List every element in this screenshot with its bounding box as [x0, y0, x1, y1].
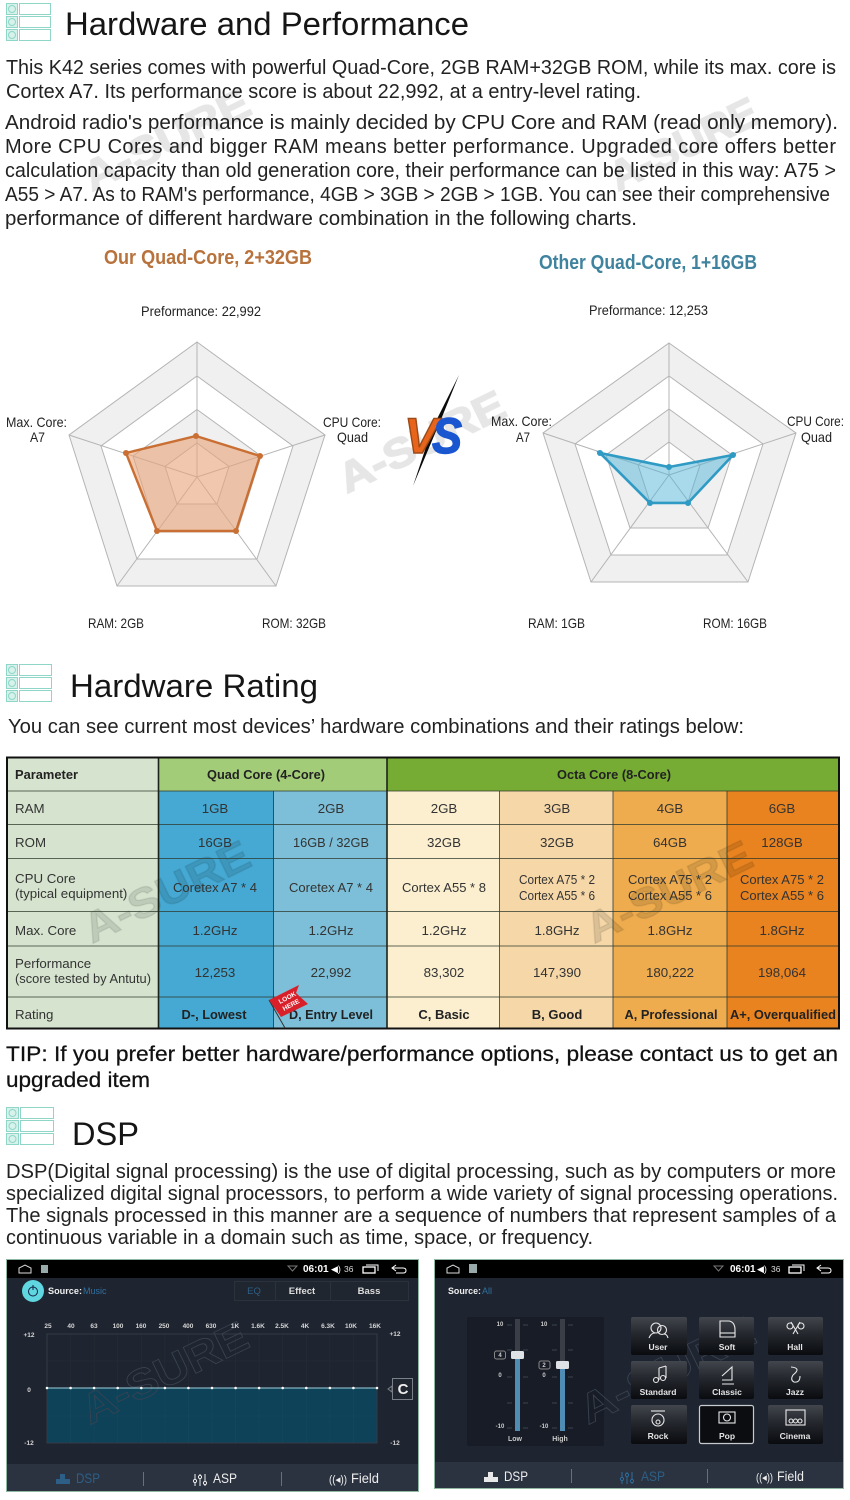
table: octa 4GB column: Cortex A75 * 2	[628, 872, 712, 887]
bottom navigation	[435, 1462, 843, 1488]
table: octa 4GB column: 180,222	[646, 965, 694, 980]
table: octa 3GB column: B, Good	[532, 1007, 582, 1022]
icon: VS badge: S	[432, 408, 462, 464]
table: octa 4GB column	[624, 801, 718, 1022]
table: 2GB column: D, Entry Level	[289, 1007, 373, 1022]
radar chart: our quad-core: Preformance: 22,992	[141, 303, 261, 319]
radar chart: our quad-core: A7	[30, 429, 45, 445]
icon: section list 3	[6, 1108, 54, 1144]
table: octa 3GB column: 32GB	[540, 835, 574, 850]
equalizer chart: -12	[24, 1440, 34, 1447]
equalizer chart: 40	[67, 1323, 75, 1330]
watermark: A-SURE	[571, 1308, 763, 1433]
table: octa 6GB column: 6GB	[769, 801, 795, 816]
table: octa 3GB column: 3GB	[544, 801, 570, 816]
table: octa 6GB column: 1.8GHz	[759, 923, 805, 938]
text block: tip	[6, 1043, 838, 1092]
preset buttons: Standard	[640, 1387, 676, 1397]
radar chart: our quad-core: Max. Core:	[6, 414, 67, 430]
table: 2GB column: 2GB	[318, 801, 344, 816]
bottom navigation: ((◂))	[756, 1472, 773, 1484]
tabs: Bass	[358, 1286, 380, 1297]
table: octa 6GB column: 128GB	[761, 835, 803, 850]
icon: reset button	[388, 1378, 412, 1400]
table: parameter column: CPU Core	[15, 871, 76, 886]
chart title: our: Our Quad-Core, 2+32GB	[104, 247, 312, 269]
table: 2GB column: 22,992	[311, 965, 351, 980]
equalizer chart: 100	[113, 1323, 124, 1330]
table: octa 6GB column: Cortex A55 * 6	[740, 888, 824, 903]
equalizer chart: +12	[389, 1331, 401, 1338]
slider panel: -10	[540, 1424, 549, 1430]
table: octa 2GB column: Cortex A55 * 8	[402, 880, 486, 895]
chart title: other: Other Quad-Core, 1+16GB	[539, 252, 757, 274]
text block: DSP description: The signals processed in this manner are a sequence of numbers that represent samples of a	[6, 1205, 837, 1227]
rating table	[7, 758, 839, 1029]
icon: status bar left	[19, 1265, 48, 1273]
equalizer chart: 1K	[231, 1323, 239, 1330]
table: octa 4GB column: 64GB	[653, 835, 687, 850]
bottom navigation: DSP	[76, 1470, 100, 1486]
icon: look here flag: HERE	[282, 998, 301, 1013]
radar chart: our quad-core: ROM: 32GB	[262, 615, 326, 631]
icon: status bar left	[447, 1264, 477, 1273]
status bar right	[714, 1264, 831, 1275]
table: octa 4GB column: 1.8GHz	[647, 923, 693, 938]
bottom navigation: DSP	[504, 1468, 528, 1484]
equalizer chart: 160	[136, 1323, 147, 1330]
table: 1GB column	[173, 801, 257, 1022]
equalizer chart: 630	[206, 1323, 217, 1330]
text block: DSP description: DSP(Digital signal processing) is the use of digital processing, such as by computers or more	[6, 1161, 836, 1183]
table: group headers: Quad Core (4-Core)	[207, 767, 325, 782]
radar chart: other quad-core: Max. Core:	[491, 413, 552, 429]
preset buttons: Soft	[719, 1342, 735, 1352]
heading: DSP: DSP	[72, 1116, 139, 1152]
watermarks over page background	[75, 79, 766, 502]
table: octa 2GB column: 83,302	[424, 965, 464, 980]
table: octa 3GB column: 147,390	[533, 965, 581, 980]
table: 1GB column: Coretex A7 * 4	[173, 880, 257, 895]
text block: tip: TIP: If you prefer better hardware/performance options, please contact us to get an	[6, 1043, 838, 1066]
radar chart: other quad-core: ROM: 16GB	[703, 615, 767, 631]
equalizer chart: 2.5K	[275, 1323, 289, 1330]
table: octa 2GB column: 32GB	[427, 835, 461, 850]
table: octa 2GB column	[402, 801, 486, 1022]
status bar right: ◀)	[757, 1264, 767, 1274]
table: parameter column: Rating	[15, 1007, 53, 1022]
table: octa 6GB column: A+, Overqualified	[730, 1007, 836, 1022]
status bar right: ◀)	[331, 1264, 341, 1274]
text block: explanation: performance of different hardware combination in the following charts.	[5, 208, 637, 230]
slider panel: 0	[542, 1373, 546, 1379]
rating table: A-SURE	[577, 831, 760, 952]
preset buttons: Jazz	[786, 1387, 804, 1397]
watermarks over page background: A-SURE	[75, 79, 258, 200]
icon: VS badge	[404, 375, 462, 486]
tabs: Effect	[289, 1286, 316, 1297]
radar chart: other quad-core: Quad	[801, 429, 832, 445]
table: octa 4GB column: A, Professional	[624, 1007, 718, 1022]
table: 2GB column: Coretex A7 * 4	[289, 880, 373, 895]
text block: explanation: Android radio's performance is mainly decided by CPU Core and RAM (read only memory).	[5, 112, 838, 134]
text block: intro	[6, 57, 836, 103]
watermarks over page background: A-SURE	[330, 381, 513, 502]
equalizer chart: 0	[27, 1387, 31, 1394]
table: 2GB column: 16GB / 32GB	[293, 835, 369, 850]
heading: Hardware Rating: Hardware Rating	[70, 668, 318, 704]
equalizer chart: 63	[90, 1323, 98, 1330]
slider panel: 10	[497, 1322, 504, 1328]
equalizer chart: -12	[390, 1440, 400, 1447]
radar chart: our quad-core	[6, 303, 381, 631]
table: parameter column: RAM	[15, 801, 45, 816]
table: octa 4GB column: 4GB	[657, 801, 683, 816]
icon: reset button: C	[398, 1381, 409, 1398]
table: octa 3GB column: Cortex A75 * 2	[519, 872, 595, 887]
tabs	[234, 1282, 408, 1300]
source label: Music	[83, 1286, 107, 1296]
preset buttons: Hall	[787, 1342, 803, 1352]
table: octa 2GB column: 2GB	[431, 801, 457, 816]
preset buttons: Cinema	[780, 1431, 811, 1441]
table: parameter column: Max. Core	[15, 923, 76, 938]
table: 1GB column: 12,253	[195, 965, 235, 980]
source label: Source:	[448, 1286, 481, 1297]
table: group headers: Octa Core (8-Core)	[557, 767, 671, 782]
table: 1GB column: 1GB	[202, 801, 228, 816]
slider panel: Low	[508, 1436, 523, 1443]
table: octa 4GB column: Cortex A55 * 6	[628, 888, 712, 903]
radar chart: other quad-core: RAM: 1GB	[528, 615, 585, 631]
table: 2GB column	[289, 801, 373, 1022]
preset buttons: Classic	[712, 1387, 742, 1397]
rating table: A-SURE	[75, 831, 258, 952]
text block: explanation: More CPU Cores and bigger RAM means better performance. Upgraded core offers better	[5, 136, 836, 158]
status bar right: 06:01	[303, 1264, 329, 1275]
text block: intro: Cortex A7. Its performance score is about 22,992, at a entry-level rating.	[6, 81, 641, 103]
icon: section list 1	[6, 4, 50, 40]
icon: look here flag: LOOK	[278, 991, 298, 1006]
slider panel: 0	[498, 1373, 502, 1379]
source label: All	[482, 1286, 492, 1296]
text block: DSP description: specialized digital signal processors, to perform a wide variety of signal processing operations.	[6, 1183, 838, 1205]
radar chart: other quad-core: Preformance: 12,253	[589, 302, 708, 318]
bottom navigation: ((◂))	[329, 1474, 347, 1486]
bottom navigation: ASP	[213, 1470, 237, 1486]
equalizer chart: +12	[23, 1332, 35, 1339]
equalizer chart: 25	[44, 1323, 52, 1330]
table: octa 6GB column	[730, 801, 836, 1022]
source label	[48, 1286, 107, 1297]
icon: power button	[22, 1280, 44, 1302]
bottom navigation: Field	[777, 1468, 804, 1484]
table: group headers	[207, 767, 671, 782]
slider panel: 2	[542, 1363, 546, 1369]
status bar right: 06:01	[730, 1264, 756, 1275]
slider panel: High	[552, 1436, 568, 1443]
table: parameter column: ROM	[15, 835, 46, 850]
equalizer chart: 16K	[369, 1323, 381, 1330]
panel: DSP equalizer screen	[6, 1260, 418, 1492]
radar chart: other quad-core: A7	[516, 429, 530, 445]
icon: look here flag	[269, 985, 308, 1028]
table: parameter column: (typical equipment)	[15, 886, 127, 901]
text block: intro: This K42 series comes with powerful Quad-Core, 2GB RAM+32GB ROM, while its max. core is	[6, 57, 836, 79]
table: octa 6GB column: 198,064	[758, 965, 806, 980]
table: parameter column: Performance	[15, 956, 91, 971]
table: parameter column: Parameter	[15, 767, 78, 782]
text block: explanation	[5, 112, 838, 230]
bottom navigation: ASP	[641, 1468, 665, 1484]
text block: explanation: calculation capacity than old generation core, their performance can be listed in this way: A75 >	[5, 160, 836, 182]
table: parameter column: (score tested by Antutu)	[15, 971, 151, 986]
table: octa 6GB column: Cortex A75 * 2	[740, 872, 824, 887]
icon: VS badge: V	[404, 408, 442, 464]
bottom navigation	[7, 1464, 418, 1491]
table: 1GB column: 1.2GHz	[192, 923, 238, 938]
panel: ASP preset screen	[434, 1260, 844, 1488]
text block: table intro: You can see current most devices’ hardware combinations and their ratings below:	[8, 716, 744, 738]
table: octa 3GB column: 1.8GHz	[534, 923, 580, 938]
equalizer chart: 1.6K	[251, 1323, 265, 1330]
slider panel: 10	[541, 1322, 548, 1328]
slider panel: 4	[498, 1353, 502, 1359]
table: octa 2GB column: 1.2GHz	[421, 923, 467, 938]
equalizer chart: 400	[183, 1323, 194, 1330]
source label: Source:	[48, 1286, 82, 1297]
equalizer chart: 250	[159, 1323, 170, 1330]
table: octa 2GB column: C, Basic	[418, 1007, 470, 1022]
table: octa 3GB column	[519, 801, 595, 1022]
status bar right	[288, 1264, 406, 1275]
status bar right: 36	[344, 1264, 354, 1274]
text block: DSP description	[6, 1161, 838, 1249]
radar chart: our quad-core: RAM: 2GB	[88, 615, 144, 631]
watermarks over page background: A-SURE	[601, 88, 766, 200]
radar chart: our quad-core: CPU Core:	[323, 414, 381, 430]
tabs: EQ	[247, 1286, 261, 1297]
preset buttons	[631, 1317, 823, 1444]
radar chart: our quad-core: Quad	[337, 429, 368, 445]
table: 1GB column: 16GB	[198, 835, 232, 850]
preset buttons: User	[649, 1342, 668, 1352]
preset buttons: Rock	[648, 1431, 669, 1441]
slider panel: -10	[496, 1424, 505, 1430]
equalizer chart: 6.3K	[321, 1323, 335, 1330]
status bar right: 36	[771, 1264, 781, 1274]
bottom navigation: Field	[351, 1470, 379, 1486]
equalizer chart: 10K	[345, 1323, 357, 1330]
table: 1GB column: D-, Lowest	[182, 1007, 247, 1022]
text block: explanation: A55 > A7. As to RAM's performance, 4GB > 3GB > 2GB > 1GB. You can see their comprehensive	[5, 184, 830, 206]
table: octa 3GB column: Cortex A55 * 6	[519, 888, 595, 903]
preset buttons: Pop	[719, 1431, 735, 1441]
equalizer chart: 4K	[301, 1323, 309, 1330]
table: parameter column	[15, 767, 151, 1022]
icon: section list 2	[6, 664, 52, 702]
equalizer chart	[23, 1312, 401, 1447]
radar chart: other quad-core	[491, 302, 844, 631]
equalizer chart: A-SURE	[73, 1312, 256, 1433]
text block: DSP description: continuous variable in a domain such as time, space, or frequency.	[6, 1227, 593, 1249]
text block: tip: upgraded item	[6, 1069, 150, 1092]
heading: Hardware and Performance: Hardware and Performance	[65, 6, 469, 42]
slider panel	[467, 1317, 604, 1446]
table: 2GB column: 1.2GHz	[308, 923, 354, 938]
